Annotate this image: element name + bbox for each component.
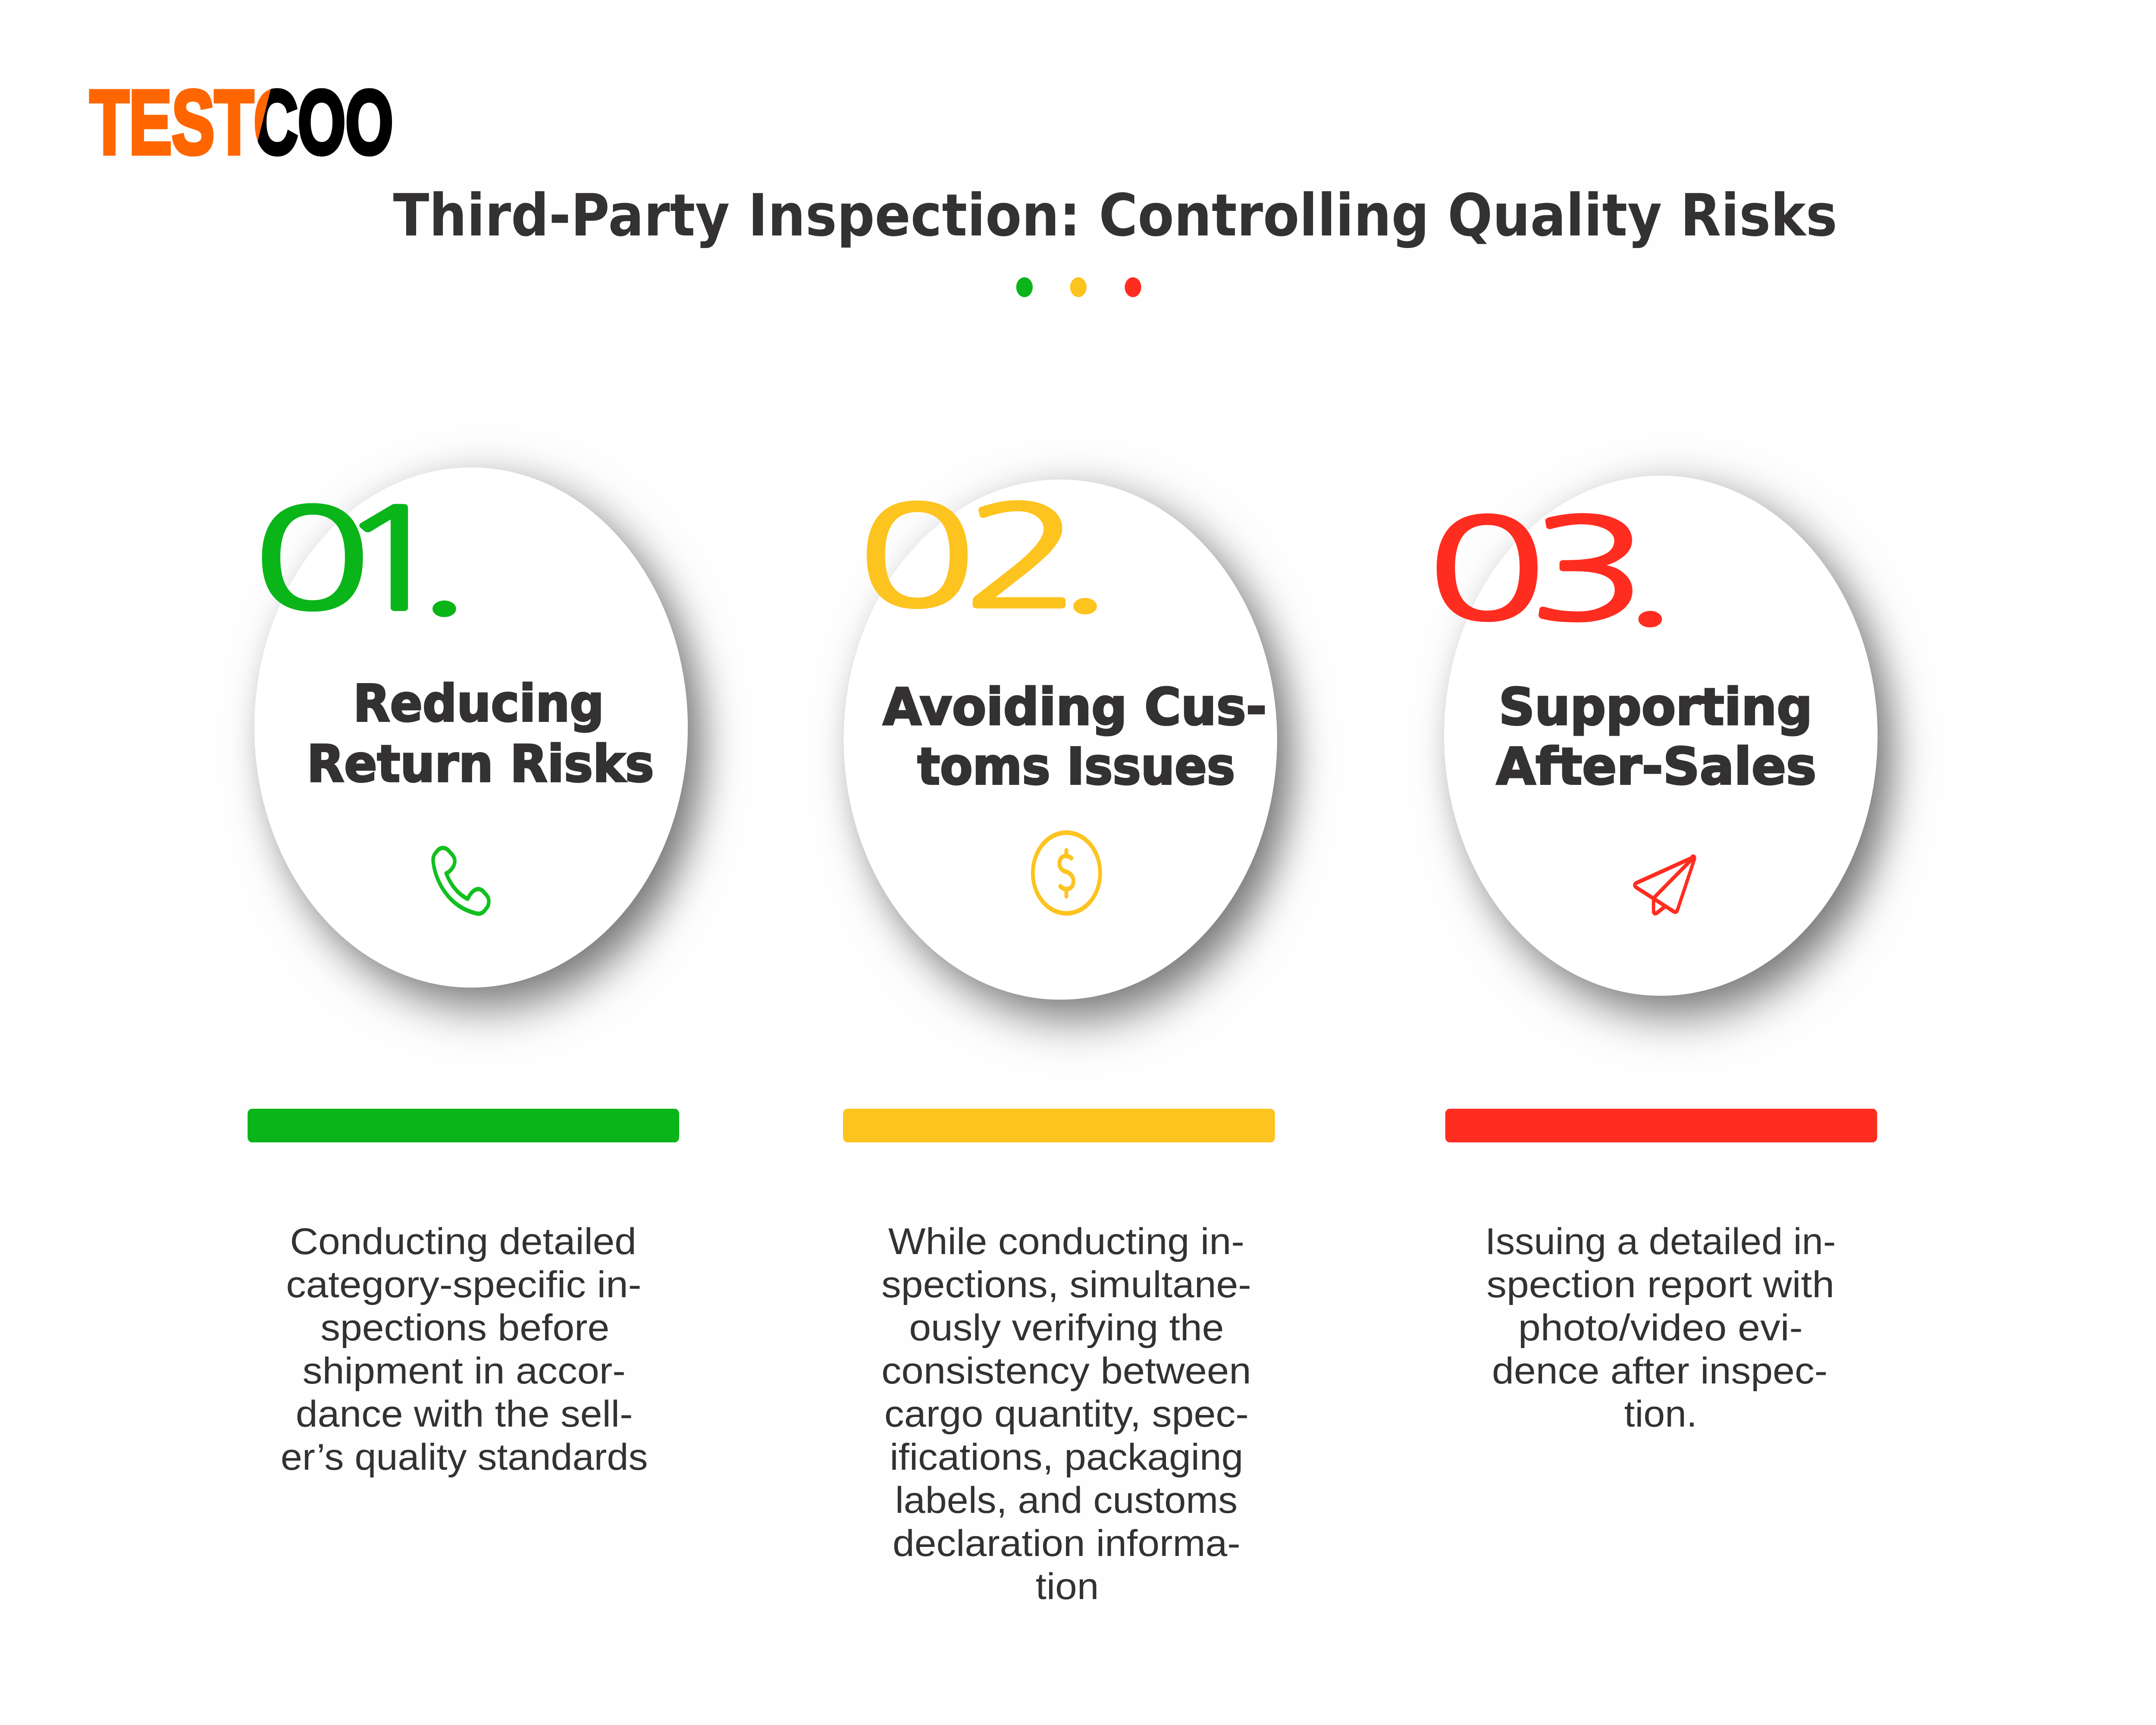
heading 2 (883, 677, 1267, 796)
number 03: 03. (1426, 500, 1679, 640)
heading 3: After-Sales (1496, 737, 1817, 796)
text block: column 2: cargo quantity, spec- (884, 1393, 1249, 1434)
circle 2 (844, 480, 1277, 1000)
text block: column 2: ously verifying the (909, 1307, 1224, 1348)
text block: column 3: Issuing a detailed in- (1485, 1220, 1836, 1262)
icon: paper plane (1635, 856, 1695, 913)
logo (90, 72, 393, 173)
heading 1: Return Risks (307, 734, 654, 794)
heading 3 (1496, 677, 1816, 796)
text block: column 3: dence after inspec- (1492, 1350, 1827, 1391)
text block: column 3: tion. (1624, 1393, 1697, 1434)
text block: column 1: shipment in accor- (303, 1350, 626, 1391)
panel: reducing return risks (252, 467, 688, 988)
logo: TEST (90, 72, 254, 173)
heading 3: Supporting (1499, 677, 1812, 737)
text block: column 2: While conducting in- (888, 1220, 1244, 1262)
circle 1 (254, 467, 688, 988)
text block: column 2: labels, and customs (895, 1479, 1238, 1521)
icon: phone (433, 848, 489, 914)
text block: column 2 (881, 1220, 1251, 1607)
number 01: 01. (252, 490, 473, 630)
title: Third-Party Inspection: Controlling Quality Risks (393, 182, 1837, 250)
text block: column 1: Conducting detailed (290, 1220, 636, 1262)
logo: COO (254, 72, 393, 173)
bar: green (248, 1109, 679, 1142)
text block: column 3 (1485, 1220, 1836, 1434)
text block: column 2: ifications, packaging (890, 1436, 1243, 1477)
bar: red (1445, 1109, 1877, 1142)
text block: column 1: dance with the sell- (296, 1393, 633, 1434)
text block: column 1 (281, 1220, 648, 1477)
text block: column 2: spections, simultane- (881, 1264, 1251, 1305)
text block: column 2: consistency between (881, 1350, 1251, 1391)
circle 3 (1444, 476, 1877, 996)
text block: column 2: declaration informa- (893, 1522, 1241, 1564)
text block: column 1: er’s quality standards (281, 1436, 648, 1477)
panel: supporting after-sales (1426, 476, 1877, 996)
heading 1: Reducing (353, 674, 604, 733)
number 02: 02. (856, 487, 1114, 627)
bar: yellow (843, 1109, 1275, 1142)
heading 1 (307, 674, 654, 794)
text block: column 3: spection report with (1487, 1264, 1834, 1305)
title dots (1016, 277, 1141, 297)
text block: column 2: tion (1036, 1565, 1099, 1607)
text block: column 3: photo/video evi- (1518, 1307, 1803, 1348)
text block: column 1: spections before (320, 1307, 609, 1348)
icon: dollar coin (1033, 833, 1100, 913)
heading 2: Avoiding Cus- (883, 677, 1267, 737)
panel: avoiding customs issues (844, 480, 1277, 1000)
heading 2: toms Issues (918, 737, 1235, 796)
text block: column 1: category-specific in- (286, 1264, 642, 1305)
